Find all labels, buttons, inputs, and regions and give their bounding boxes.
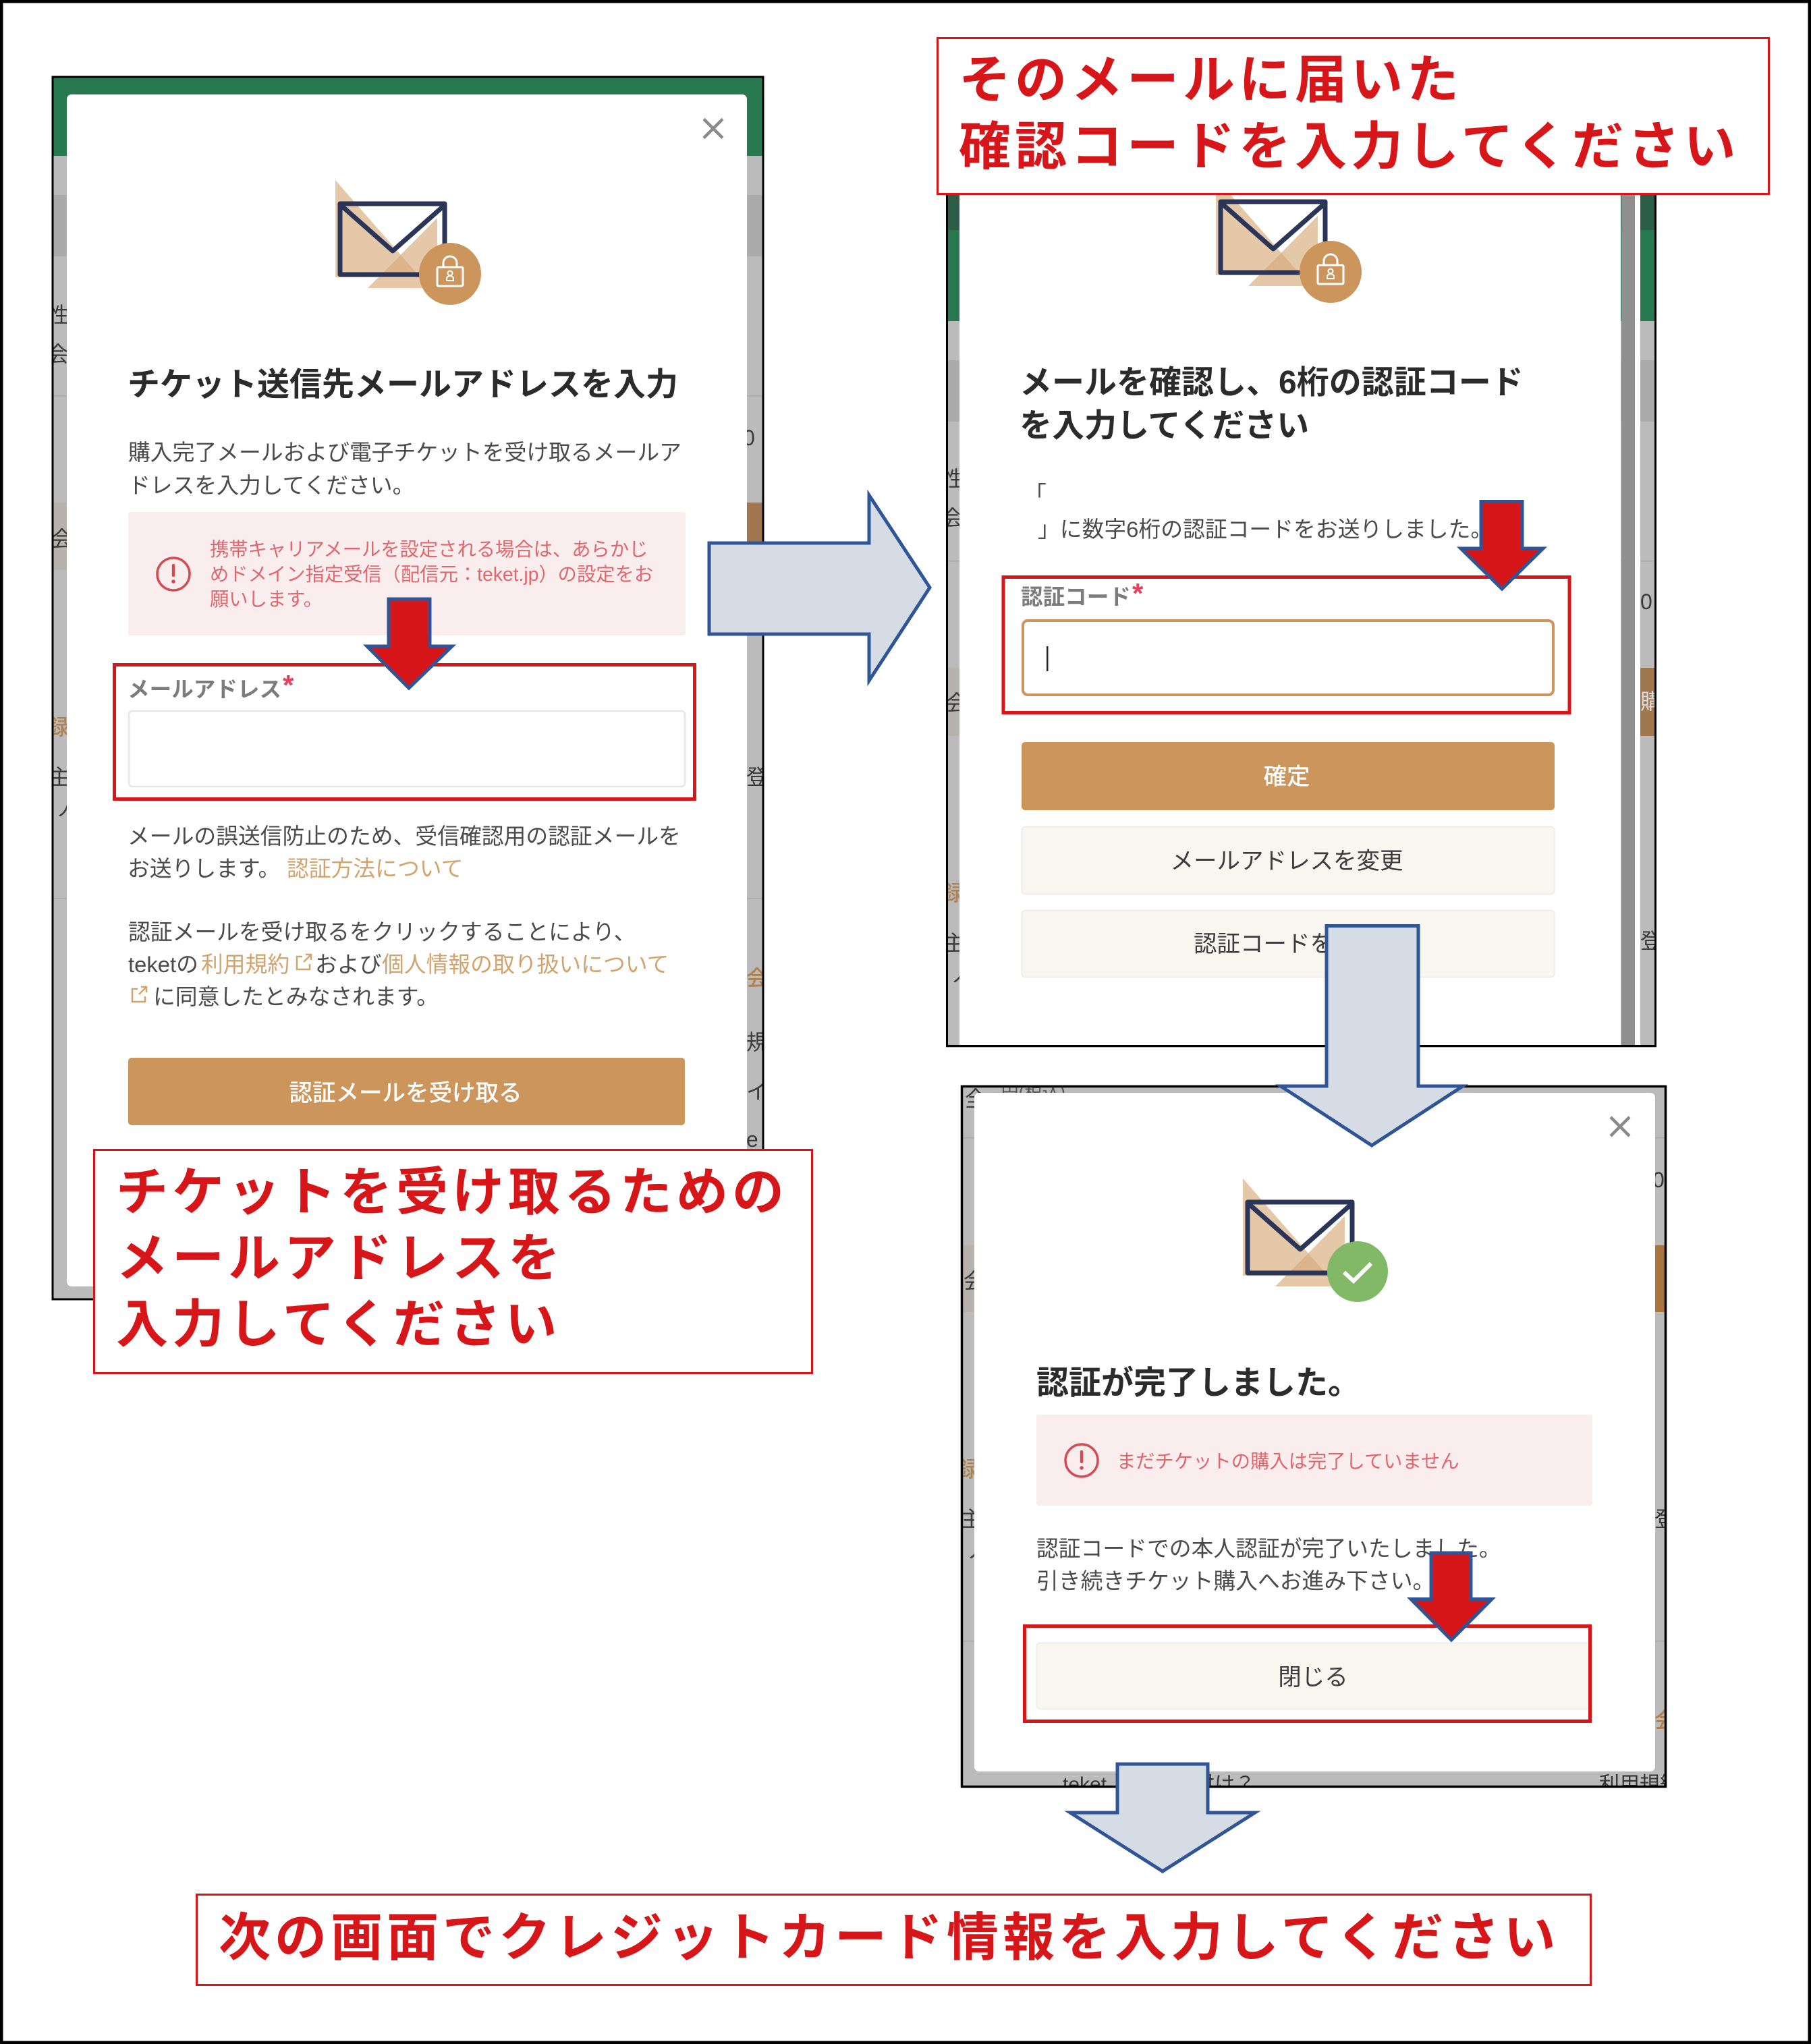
panel: verification complete screen: 登 bbox=[1654, 1507, 1676, 1531]
terms text: 個人情報の取り扱いについて bbox=[382, 952, 669, 977]
button: close: 閉じる bbox=[1278, 1665, 1348, 1691]
panel: email entry screen: 登 bbox=[746, 765, 768, 789]
button: receive email: 認証メールを受け取る bbox=[289, 1081, 522, 1106]
icon: envelope with lock bbox=[1216, 178, 1362, 303]
panel: verification code screen: 購 bbox=[1640, 689, 1662, 714]
alert box: 携帯キャリアメールを設定される場合は、あらかじ bbox=[210, 538, 648, 560]
panel: email entry screen: 会 bbox=[51, 527, 73, 551]
code field bbox=[1021, 577, 1553, 695]
heading bbox=[1020, 365, 1524, 444]
panel: verification complete screen: 受付け？ bbox=[1174, 1773, 1255, 1796]
panel: verification code screen: 主 bbox=[943, 931, 965, 955]
heading: チケット送信先メールアドレスを入力 bbox=[128, 367, 678, 403]
terms text: teketの bbox=[128, 952, 198, 977]
panel: verification code screen: 登 bbox=[1640, 929, 1662, 953]
alert box: まだチケットの購入は完了していません bbox=[1117, 1450, 1459, 1472]
callout: enter confirmation code bbox=[938, 38, 1769, 194]
code field: 認証コード bbox=[1021, 584, 1131, 609]
arrow: step 3 to next screen bbox=[1070, 1764, 1255, 1871]
modal card bbox=[959, 189, 1621, 1047]
callout: enter confirmation code: そのメールに届いた bbox=[959, 51, 1463, 109]
highlight: close button bbox=[1024, 1626, 1590, 1722]
alert box bbox=[1036, 1415, 1592, 1506]
panel: verification complete screen bbox=[957, 1082, 1680, 1796]
panel: email entry screen: 規 bbox=[746, 1030, 768, 1054]
callout: enter credit card info bbox=[197, 1894, 1591, 1985]
completion text bbox=[1036, 1536, 1501, 1593]
panel: email entry screen: 録 bbox=[47, 715, 69, 739]
panel: verification complete screen: 会 bbox=[1654, 1708, 1676, 1732]
email field: * bbox=[283, 669, 294, 701]
arrow: red pointer to close button bbox=[1411, 1553, 1492, 1640]
panel: email entry screen: 性 bbox=[47, 303, 69, 327]
panel: verification complete screen: 人 bbox=[969, 1537, 991, 1562]
panel: verification code screen: 録 bbox=[942, 881, 964, 905]
modal card bbox=[67, 94, 747, 1286]
icon: envelope with check bbox=[1243, 1179, 1388, 1302]
terms text: に同意したとみなされます。 bbox=[153, 984, 439, 1009]
panel: verification complete screen: 主 bbox=[961, 1507, 982, 1531]
panel: verification complete screen: teket bbox=[1063, 1773, 1107, 1796]
panel: email entry screen bbox=[47, 77, 768, 1299]
callout: enter credit card info: 次の画面でクレジットカード情報を入力してください bbox=[219, 1909, 1559, 1967]
verification note: お送りします。 bbox=[128, 856, 280, 881]
panel: verification code screen: 性 bbox=[942, 467, 964, 491]
terms text: 利用規約 bbox=[201, 952, 289, 977]
panel: email entry screen: 0 bbox=[743, 426, 755, 450]
verification note: 認証方法について bbox=[287, 856, 463, 881]
button: change email bbox=[1022, 827, 1555, 895]
panel: email entry screen: e bbox=[746, 1127, 758, 1152]
panel: verification code screen bbox=[942, 178, 1662, 1048]
callout: enter email: 入力してください bbox=[116, 1296, 561, 1354]
button: change email: メールアドレスを変更 bbox=[1170, 849, 1403, 874]
callout: enter email: メールアドレスを bbox=[116, 1230, 564, 1288]
icon: close bbox=[704, 119, 723, 138]
alert box: めドメイン指定受信（配信元：teket.jp）の設定をお bbox=[210, 563, 653, 585]
panel: email entry screen: イ bbox=[746, 1079, 768, 1104]
panel: verification complete screen: 全 bbox=[965, 1087, 986, 1111]
panel: verification complete screen: 0 bbox=[1652, 1168, 1665, 1192]
arrow: step 1 to step 2 bbox=[709, 495, 930, 681]
alert box: 願いします。 bbox=[210, 588, 323, 610]
email field bbox=[128, 669, 685, 787]
panel: email entry screen: 人 bbox=[58, 795, 80, 820]
panel: email entry screen: 会 bbox=[746, 966, 768, 990]
intro text: 購入完了メールおよび電子チケットを受け取るメールア bbox=[128, 440, 681, 465]
button: close bbox=[1036, 1643, 1591, 1709]
icon: envelope with lock bbox=[335, 180, 481, 305]
heading: を入力してください bbox=[1020, 408, 1309, 444]
sent-code text: 「 bbox=[1024, 482, 1047, 507]
button: receive email bbox=[128, 1058, 685, 1125]
highlight: code field bbox=[1003, 577, 1569, 712]
panel: verification code screen: 会 bbox=[942, 506, 964, 530]
modal card bbox=[974, 1093, 1655, 1771]
panel: email entry screen: 会 bbox=[47, 342, 69, 366]
terms text: および bbox=[315, 952, 381, 977]
callout: enter email bbox=[94, 1149, 812, 1373]
intro text: ドレスを入力してください。 bbox=[128, 473, 414, 498]
code field: * bbox=[1132, 577, 1144, 609]
panel: verification complete screen: 録 bbox=[957, 1457, 978, 1481]
highlight: email field bbox=[115, 665, 695, 799]
heading: 認証が完了しました。 bbox=[1036, 1365, 1360, 1401]
panel: verification code screen: 会 bbox=[946, 691, 968, 715]
sent-code text: 」に数字6桁の認証コードをお送りしました。 bbox=[1038, 517, 1493, 542]
panel: email entry screen: 主 bbox=[49, 765, 70, 789]
panel: verification code screen: 0 bbox=[1640, 590, 1652, 614]
alert box bbox=[128, 512, 686, 635]
button: resend code: 認証コードを再送 bbox=[1194, 932, 1380, 957]
sent-code text bbox=[1024, 482, 1493, 542]
email field: メールアドレス bbox=[128, 677, 281, 702]
heading: メールを確認し、6桁の認証コード bbox=[1020, 365, 1524, 401]
completion text: 引き続きチケット購入へお進み下さい。 bbox=[1036, 1568, 1434, 1593]
arrow: red pointer to email field bbox=[367, 599, 452, 688]
callout: enter email: チケットを受け取るための bbox=[116, 1164, 788, 1222]
button: confirm bbox=[1022, 742, 1555, 810]
verification note bbox=[128, 824, 681, 881]
panel: verification complete screen: 会 bbox=[964, 1269, 985, 1293]
panel: verification code screen: 人 bbox=[953, 961, 974, 986]
panel: verification complete screen: 利用規約 bbox=[1599, 1773, 1680, 1796]
callout: enter confirmation code: 確認コードを入力してください bbox=[959, 118, 1739, 176]
icon: close bbox=[1611, 1117, 1629, 1136]
arrow: step 2 to step 3 bbox=[1281, 926, 1463, 1145]
terms text bbox=[128, 919, 669, 1009]
verification note: メールの誤送信防止のため、受信確認用の認証メールを bbox=[128, 824, 681, 849]
scrollbar bbox=[1621, 195, 1635, 1046]
intro text bbox=[128, 440, 681, 498]
terms text: 認証メールを受け取るをクリックすることにより、 bbox=[128, 919, 636, 944]
arrow: red pointer to code field bbox=[1461, 502, 1543, 589]
button: resend code bbox=[1022, 911, 1555, 977]
panel: verification complete screen: -円(税込) bbox=[995, 1082, 1065, 1102]
button: confirm: 確定 bbox=[1263, 764, 1310, 790]
completion text: 認証コードでの本人認証が完了いたしました。 bbox=[1036, 1536, 1501, 1561]
